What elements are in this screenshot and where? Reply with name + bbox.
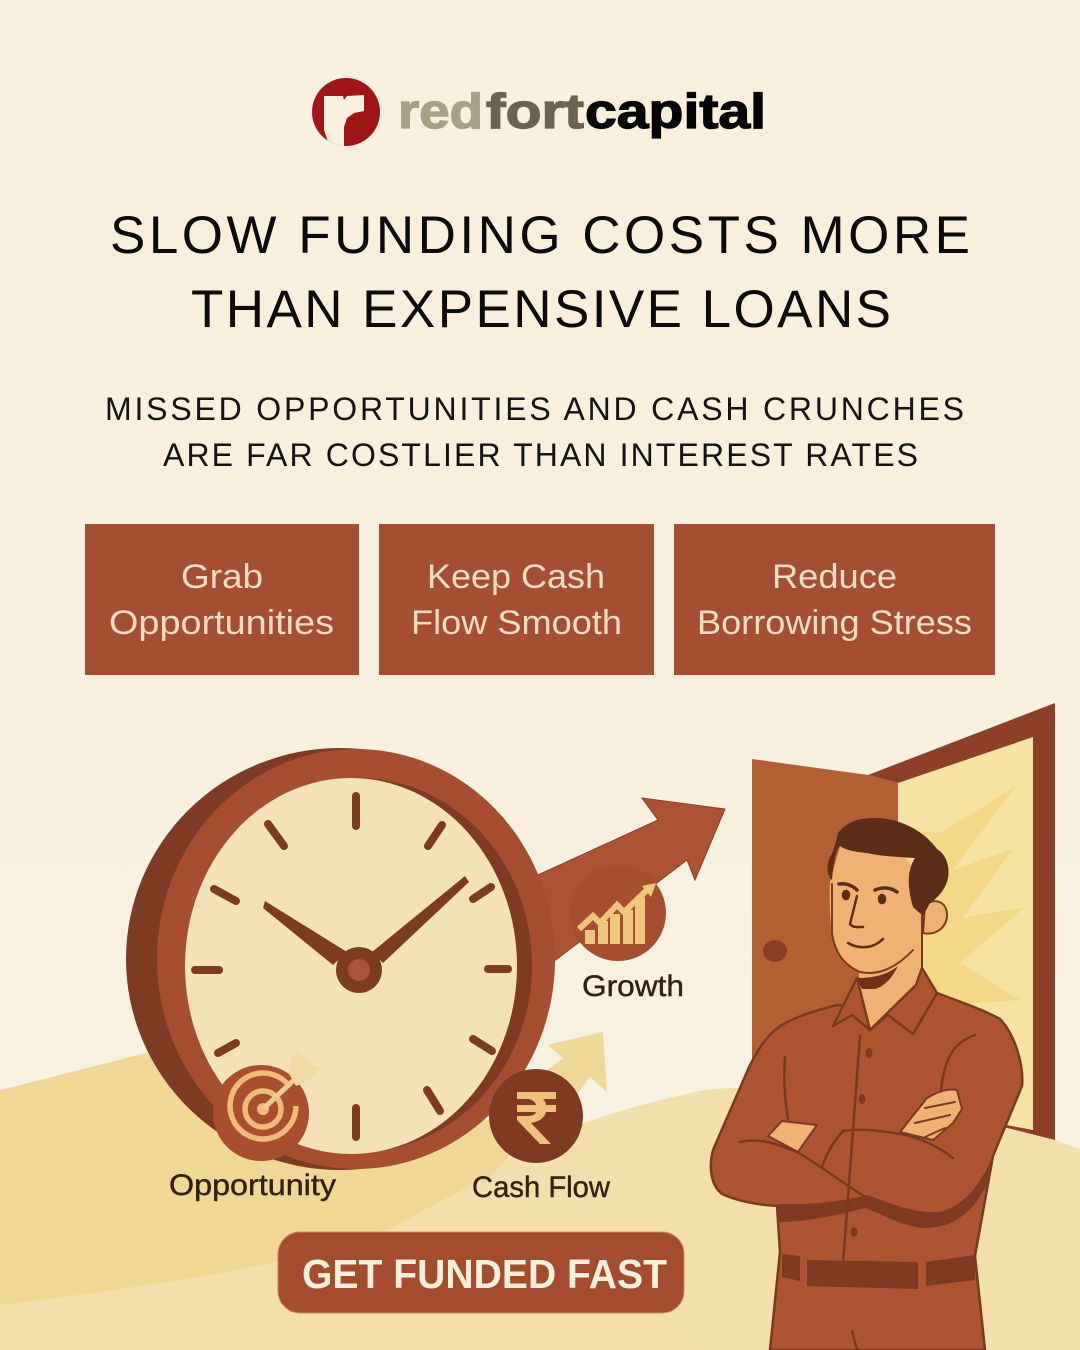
subtitle — [105, 391, 964, 473]
pale cash flow arrow — [520, 1032, 607, 1130]
logo — [312, 78, 766, 148]
growth arrow — [535, 798, 725, 962]
cash flow icon — [489, 1069, 583, 1163]
shirt body — [711, 993, 1022, 1350]
shirt fold shadow — [778, 1156, 993, 1228]
title — [110, 206, 970, 339]
neck and face — [830, 846, 922, 1030]
subtitle: ARE FAR COSTLIER THAN INTEREST RATES — [163, 437, 918, 473]
hair — [828, 818, 949, 916]
benefit box: grab opportunities: Opportunities — [109, 604, 334, 642]
logo wordmark: fort — [486, 85, 584, 139]
logo wordmark — [398, 85, 766, 139]
clock ticks — [195, 796, 508, 1137]
hands — [768, 1089, 962, 1152]
shirt buttons — [850, 1048, 872, 1237]
shirt collar — [833, 968, 937, 1034]
facial features — [839, 884, 897, 947]
ear — [923, 901, 947, 934]
man with crossed arms — [711, 818, 1022, 1350]
sand in front of door — [745, 1088, 1080, 1220]
growth icon — [570, 865, 666, 961]
logo wordmark: red — [398, 85, 483, 139]
door knob — [763, 940, 787, 962]
clock rim — [126, 748, 554, 1170]
opportunity label: Opportunity — [169, 1169, 336, 1202]
opportunity icon — [213, 1052, 322, 1161]
logo wordmark: capital — [585, 85, 766, 139]
benefit box: reduce borrowing stress — [674, 524, 995, 675]
call to action button: GET FUNDED FAST — [302, 1251, 667, 1297]
door panel — [752, 759, 898, 1110]
logo mark — [312, 78, 380, 148]
benefit box: reduce borrowing stress: Borrowing Stress — [697, 604, 972, 642]
call to action button — [278, 1232, 684, 1313]
title: SLOW FUNDING COSTS MORE — [110, 206, 970, 265]
clock — [126, 748, 555, 1170]
belt — [782, 1254, 975, 1289]
benefit box: keep cash flow smooth: Keep Cash — [427, 558, 605, 596]
subtitle: MISSED OPPORTUNITIES AND CASH CRUNCHES — [105, 391, 964, 427]
benefit box: grab opportunities — [85, 524, 359, 675]
open door — [752, 703, 1055, 1140]
clock face — [185, 778, 532, 1154]
benefit box: reduce borrowing stress: Reduce — [772, 558, 897, 596]
door frame — [868, 703, 1055, 1140]
shirt details and arms — [740, 1035, 975, 1350]
clock hands — [263, 876, 469, 993]
cash flow label: Cash Flow — [472, 1171, 610, 1204]
door opening light — [898, 737, 1033, 1130]
benefit box: keep cash flow smooth: Flow Smooth — [411, 604, 622, 642]
benefit box: keep cash flow smooth — [379, 524, 654, 675]
title: THAN EXPENSIVE LOANS — [191, 280, 891, 339]
growth label: Growth — [582, 970, 684, 1003]
sand hills — [0, 1048, 1080, 1350]
rupee symbol — [517, 1092, 556, 1144]
benefit box: grab opportunities: Grab — [181, 558, 263, 596]
